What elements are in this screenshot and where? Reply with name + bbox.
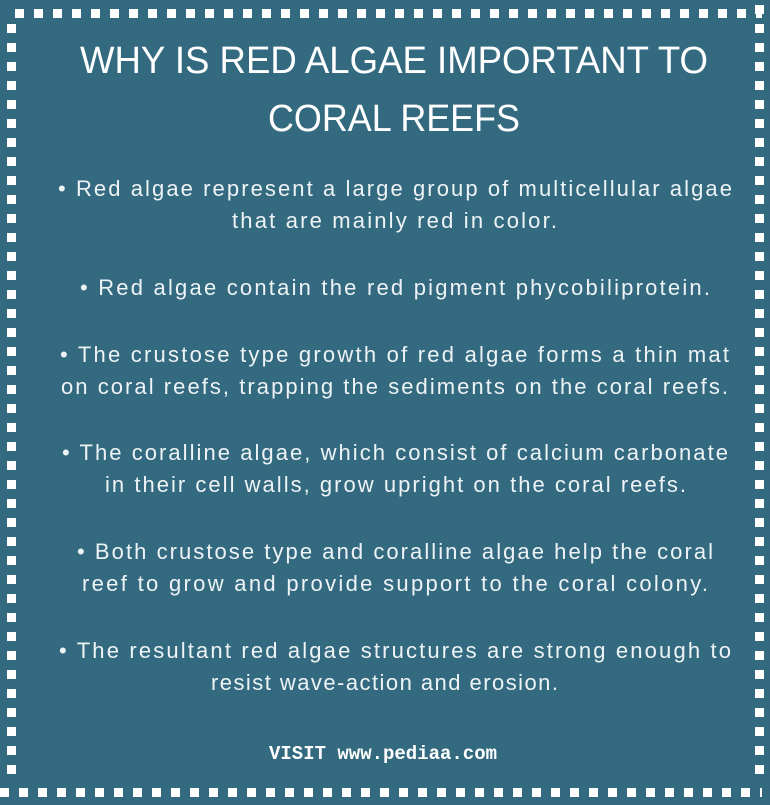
bullet 4: in their cell walls, grow upright on the coral reefs.: [105, 472, 686, 497]
bullet 6: [59, 638, 731, 695]
bullet 5: reef to grow and provide support to the coral colony.: [82, 571, 708, 596]
bullet 1: • Red algae represent a large group of multicellular algae: [58, 176, 732, 201]
bullet 5: [77, 539, 713, 596]
body text: bullet points: [58, 176, 732, 695]
title: WHY IS RED ALGAE IMPORTANT TO: [80, 40, 708, 82]
bullet 3: on coral reefs, trapping the sediments on the coral reefs.: [61, 374, 728, 399]
bullet 6: • The resultant red algae structures are strong enough to: [59, 638, 731, 663]
bullet 4: [62, 440, 728, 497]
footer: VISIT www.pediaa.com: [269, 743, 497, 765]
bullet 5: • Both crustose type and coralline algae help the coral: [77, 539, 713, 564]
bullet 6: resist wave-action and erosion.: [211, 670, 558, 695]
bullet 3: • The crustose type growth of red algae forms a thin mat: [60, 342, 729, 367]
title: [80, 40, 708, 140]
bullet 4: • The coralline algae, which consist of calcium carbonate: [62, 440, 728, 465]
bullet 3: [60, 342, 729, 399]
bullet 2: • Red algae contain the red pigment phycobiliprotein.: [80, 275, 710, 300]
bullet 1: [58, 176, 732, 233]
bullet 1: that are mainly red in color.: [232, 208, 557, 233]
title: CORAL REEFS: [268, 98, 520, 140]
